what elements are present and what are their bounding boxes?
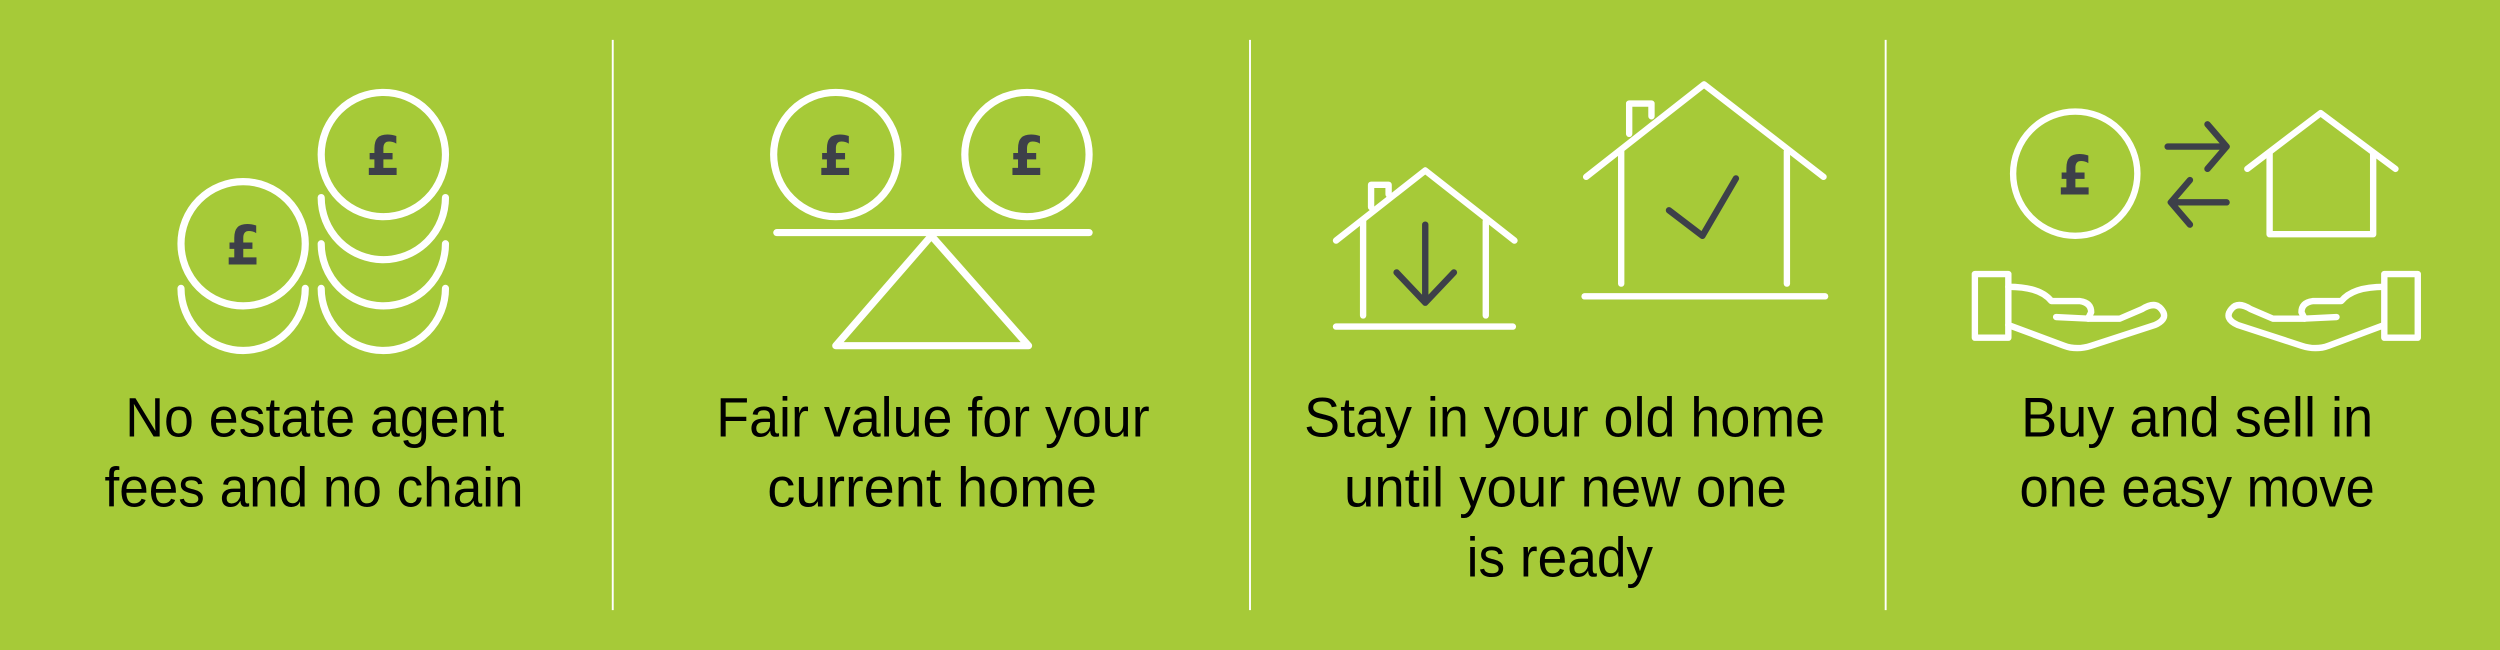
icon: coin, arrows, house, hands: £	[2058, 144, 2093, 207]
icon: small house with down arrow	[1336, 170, 1514, 327]
panel: stay in old home	[1304, 84, 1825, 589]
icon: coin stacks	[181, 92, 445, 350]
text: caption 3	[1304, 387, 1825, 589]
text: caption 1: fees and no chain	[105, 457, 524, 519]
text: caption 3: is ready	[1467, 527, 1653, 589]
text: caption 2: current home	[767, 457, 1097, 519]
icon: coin stacks: £	[366, 125, 401, 188]
icon: scale with coins	[774, 92, 1089, 346]
text: caption 2	[716, 387, 1150, 519]
text: caption 1	[105, 387, 524, 519]
icon: coin, arrows, house, hands	[1975, 112, 2418, 348]
panel: buy and sell	[1975, 112, 2418, 519]
panel: no estate agent fees	[105, 92, 524, 519]
icon: scale with coins: £	[818, 125, 853, 188]
text: caption 1: No estate agent	[125, 387, 505, 449]
icon: scale with coins: £	[1009, 125, 1044, 188]
text: caption 3: until your new one	[1344, 457, 1787, 519]
text: caption 2: Fair value for your	[716, 387, 1150, 449]
panel: fair value	[716, 92, 1150, 519]
text: caption 4	[2019, 387, 2375, 519]
text: caption 3: Stay in your old home	[1304, 387, 1825, 449]
icon: big house with check	[1585, 84, 1825, 296]
text: caption 4: one easy move	[2019, 457, 2375, 519]
text: caption 4: Buy and sell in	[2021, 387, 2373, 449]
icon: coin stacks: £	[226, 214, 261, 277]
